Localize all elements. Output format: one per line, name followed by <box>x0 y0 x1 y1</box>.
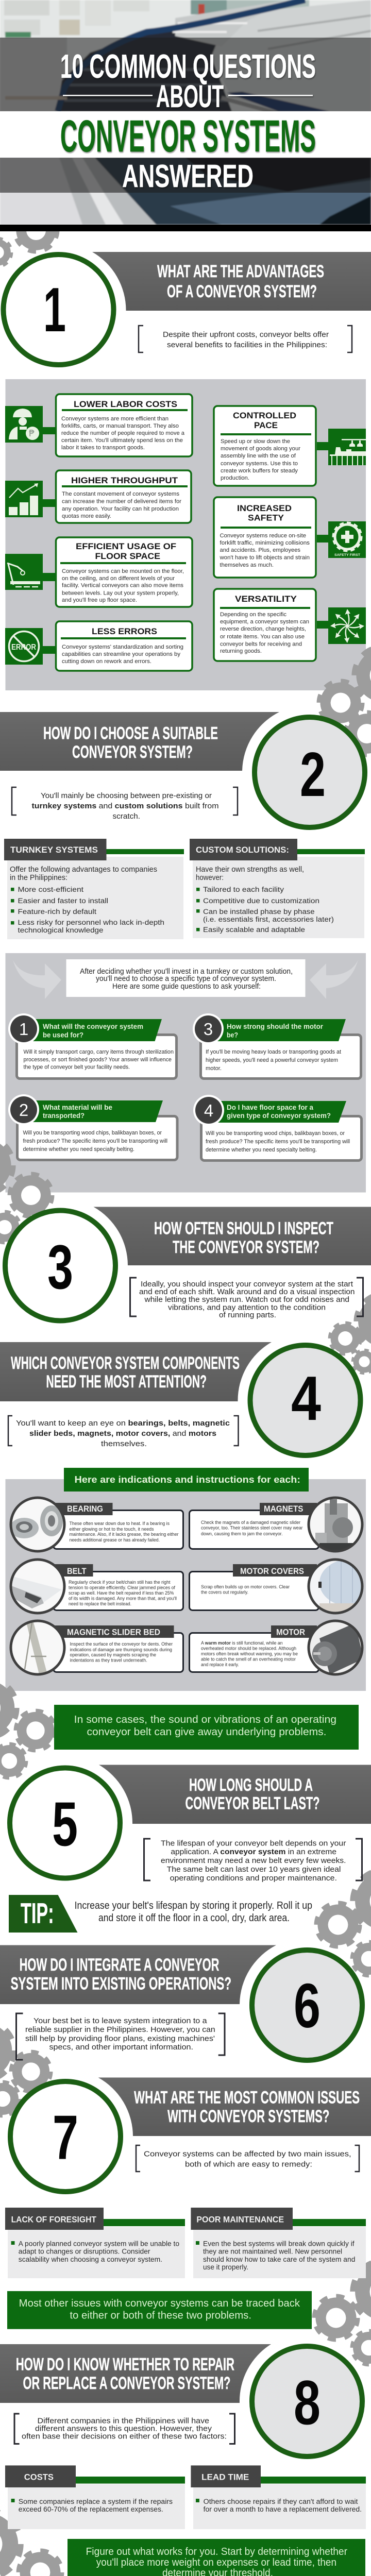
panel: turnkey systems: More cost-efficient <box>18 886 83 893</box>
banner: indications and instructions: Here are indications and instructions for each: <box>74 1475 300 1485</box>
panel: custom solutions <box>190 839 365 938</box>
card: controlled pace: conveyor systems. Use this to <box>221 461 298 467</box>
callout: sounds and vibrations: In some cases, the sound or vibrations of an operating <box>74 1714 336 1725</box>
heading <box>154 1219 333 1257</box>
panel: lack of foresight: A poorly planned conveyor system will be unable to <box>19 2240 179 2248</box>
card: question 1: be used for? <box>43 1030 83 1039</box>
card: motor: A warm motor is still functional, while an <box>201 1640 282 1646</box>
card: magnetic slider bed: indications of damage are thumping sounds during <box>70 1647 172 1653</box>
section 1: advantages <box>3 252 371 365</box>
card: increased safety: and accidents. Plus, employees <box>220 547 301 553</box>
intro text in brackets: turnkey systems and custom solutions built from <box>32 802 218 810</box>
card: efficient usage of floor space <box>43 537 192 607</box>
card: motor: overheated motor should be replaced. Although <box>201 1646 296 1652</box>
intro text in brackets <box>136 2145 359 2172</box>
callout: figure out what works <box>68 2539 365 2576</box>
panel: turnkey systems: Easier and faster to install <box>18 897 108 905</box>
panel: lead time: LEAD TIME <box>201 2473 249 2482</box>
heading band <box>0 1342 272 1401</box>
card: question 3: higher speeds, you'll need a powerful conveyor system <box>206 1057 338 1063</box>
card: less errors: cutting down on rework and errors. <box>62 658 151 665</box>
callout: guide question intro: After deciding whether you'll invest in a turnkey or custom solution, <box>80 968 293 976</box>
intro text in brackets: Despite their upfront costs, conveyor belts offer <box>163 331 329 339</box>
number circle 6: 6 <box>294 1971 321 2041</box>
panel: lead time: for over a month to have a replacement delivered. <box>204 2505 362 2513</box>
panel: lack of foresight: adapt to changes or disruptions. Consider <box>19 2248 150 2256</box>
number circle 2 <box>255 717 365 827</box>
icon: worker with peso coin <box>5 406 43 443</box>
card: question 2 <box>8 1094 177 1160</box>
card: question 1: What will the conveyor system <box>43 1022 143 1030</box>
panel: lead time: Others choose repairs if they can't afford to wait <box>204 2498 358 2505</box>
card: lower labor costs <box>43 394 192 456</box>
arrow: left decorative pointer <box>13 960 61 999</box>
number circle 1 <box>3 255 113 365</box>
panel: turnkey systems: Offer the following advantages to companies <box>10 866 157 874</box>
intro text in brackets: both of which are easy to remedy: <box>185 2161 312 2169</box>
card: question 4: determine whether you need specialty belting. <box>206 1147 317 1153</box>
panel: custom solutions: Can be installed phase by phase <box>203 908 314 916</box>
card: versatility <box>214 589 328 661</box>
intro text in brackets: slider beds, magnets, motor covers, and motors <box>29 1430 216 1438</box>
card: lower labor costs: reduce the number of people required to move a <box>61 430 185 436</box>
panel: turnkey systems: in the Philippines: <box>10 874 68 882</box>
heading: HOW DO I INTEGRATE A CONVEYOR <box>20 1955 219 1975</box>
card: bearing: maintenance. Also, if it lacks grease, the bearing either <box>69 1532 178 1537</box>
number circle 3: 3 <box>47 1232 73 1302</box>
card: question 1: processes, or sort finished goods? Your answer will influence <box>24 1057 172 1063</box>
heading: HOW DO I CHOOSE A SUITABLE <box>43 723 218 743</box>
intro text in brackets: Conveyor systems can be affected by two main issues, <box>144 2150 351 2159</box>
section 5: belt lifespan <box>9 1765 371 1933</box>
card: motor covers: the covers out regularly. <box>201 1590 248 1595</box>
panel: poor maintenance: use it properly. <box>203 2263 248 2271</box>
card: question 3: If you'll be moving heavy loads or transporting goods at <box>206 1049 341 1055</box>
heading <box>185 1775 319 1814</box>
panel: turnkey systems: Less risky for personnel who lack in-depth <box>18 919 164 926</box>
heading band <box>99 1765 371 1824</box>
callout: figure out what works: Figure out what works for you. Start by determining whether <box>86 2546 347 2557</box>
card: question 4: 4 <box>204 1101 213 1120</box>
heading <box>43 723 218 762</box>
heading: NEED THE MOST ATTENTION? <box>46 1372 207 1392</box>
intro text in brackets: Ideally, you should inspect your conveyor system at the start <box>141 1280 353 1289</box>
card: question 2: determine whether you need specialty belting. <box>23 1146 134 1153</box>
panel: turnkey systems: Feature-rich by default <box>18 908 96 916</box>
card: efficient usage of floor space: Conveyor systems can be mounted on the floor, <box>62 568 184 574</box>
number circle 7 <box>10 2081 121 2192</box>
panel: poor maintenance: POOR MAINTENANCE <box>196 2215 284 2225</box>
card: increased safety: Conveyor systems reduce on-site <box>220 533 306 539</box>
title: ANSWERED <box>122 159 254 194</box>
white title band <box>0 111 371 158</box>
title <box>60 47 316 194</box>
number circle 4: 4 <box>291 1363 321 1433</box>
card: efficient usage of floor space: between levels. Lay out your system properly, <box>62 590 179 597</box>
card: versatility: VERSATILITY <box>235 595 297 604</box>
card: controlled pace: PACE <box>254 421 278 430</box>
intro text in brackets <box>16 2013 225 2060</box>
card: motor covers <box>190 1558 371 1614</box>
card: motor <box>190 1620 363 1675</box>
card: magnetic slider bed: Inspect the surface of the conveyor for dents. Other <box>70 1641 173 1647</box>
panel: custom solutions: however: <box>196 874 224 882</box>
card: efficient usage of floor space: facility. Vertical conveyors can also move items <box>62 582 184 588</box>
card: controlled pace: create work buffers for steady <box>221 468 298 474</box>
heading <box>134 2088 360 2126</box>
card: efficient usage of floor space: EFFICIENT USAGE OF <box>76 542 176 551</box>
heading <box>157 262 324 301</box>
card: motor: able to catch the smell of an overheating motor <box>201 1657 296 1663</box>
icon: no errors sign: ERROR <box>11 643 36 652</box>
number circle 1: 1 <box>43 275 66 345</box>
card: question 1: 1 <box>19 1020 28 1039</box>
intro text in brackets: reliable supplier in the Philippines. However, you can <box>25 2026 215 2034</box>
intro text in brackets: Your best bet is to leave system integration to a <box>33 2017 208 2025</box>
card: versatility: reverse direction, change heights, <box>220 626 306 632</box>
heading: HOW DO I KNOW WHETHER TO REPAIR <box>16 2355 234 2375</box>
number circle 5: 5 <box>52 1789 78 1859</box>
section 6: integration <box>0 1945 362 2060</box>
card: question 2: transported? <box>43 1111 85 1120</box>
icon: no errors sign <box>5 628 43 665</box>
intro text in brackets: application. A conveyor system in an extreme <box>171 1848 336 1856</box>
card: lower labor costs: LOWER LABOR COSTS <box>74 400 177 409</box>
intro text in brackets: The lifespan of your conveyor belt depends on your <box>161 1839 346 1848</box>
intro text in brackets: specs, and other important information. <box>49 2043 193 2052</box>
heading: SYSTEM INTO EXISTING OPERATIONS? <box>11 1974 231 1994</box>
title: ABOUT <box>156 79 224 114</box>
card: efficient usage of floor space: on the ceiling, and on different levels of your <box>62 575 175 582</box>
card: bearing: either glowing or hot to the touch, it needs <box>69 1527 154 1532</box>
intro text in brackets: and end of each shift. Walk around and do a visual inspection <box>139 1288 355 1296</box>
card: magnets: MAGNETS <box>264 1504 303 1514</box>
intro text in brackets <box>139 326 352 352</box>
card: magnets: conveyor, too. Their stainless steel cover may wear <box>201 1525 303 1531</box>
card: less errors: Conveyor systems' standardization and sorting <box>62 644 183 650</box>
callout: guide question intro <box>66 959 305 997</box>
card: versatility: Depending on the specific <box>220 612 287 618</box>
card: increased safety: forklift traffic, minimizing collisions <box>220 540 310 546</box>
hero photo: conveyor line <box>0 0 371 225</box>
intro text in brackets <box>8 1416 238 1448</box>
card: magnets: Check the magnets of a damaged magnetic slider <box>201 1520 300 1526</box>
callout: sounds and vibrations: conveyor belt can give away underlying problems. <box>87 1726 327 1738</box>
panel: lack of foresight <box>5 2208 185 2278</box>
card: belt: need to replace the belt instead. <box>69 1601 131 1607</box>
panel: poor maintenance: should know how to take care of the system and <box>203 2256 355 2263</box>
tip text <box>75 1900 312 1924</box>
arrow: right decorative pointer <box>310 960 358 999</box>
card: magnetic slider bed: indentations as they travel underneath. <box>70 1658 147 1663</box>
heading band <box>0 1945 276 2004</box>
card: efficient usage of floor space: FLOOR SPACE <box>95 552 160 561</box>
card: question 4: Will you be transporting wood chips, balikbayan boxes, or <box>206 1130 345 1137</box>
card: versatility: returning goods. <box>220 648 262 654</box>
panel: costs: Some companies replace a system if the repairs <box>19 2498 173 2505</box>
number circle 8 <box>252 2346 362 2456</box>
intro text in brackets: Different companies in the Philippines will have <box>37 2417 209 2426</box>
callout: two problems <box>7 2291 312 2329</box>
card: increased safety <box>214 497 328 578</box>
icon: robot arm <box>5 554 43 590</box>
card: motor covers: MOTOR COVERS <box>240 1567 304 1576</box>
card: higher throughput: can increase the number of delivered items for <box>62 499 181 505</box>
card: question 3: 3 <box>204 1020 213 1039</box>
heading <box>11 1955 231 1994</box>
card: belt: BELT <box>67 1567 87 1576</box>
card: question 3 <box>193 1013 361 1079</box>
card: question 2: 2 <box>19 1100 28 1120</box>
panel: costs: exceed 60-70% of the replacement expenses. <box>19 2505 163 2513</box>
card: increased safety: INCREASED <box>237 504 292 513</box>
tip text: and store it off the floor in a cool, dry, dark area. <box>98 1912 290 1924</box>
card: belt <box>9 1558 183 1614</box>
heading band <box>94 1207 371 1265</box>
intro text in brackets <box>144 1839 362 1883</box>
panel: custom solutions: (i.e. essentials first, accessories later) <box>203 916 334 923</box>
panel: lead time <box>191 2465 366 2529</box>
card: belt: scrap as well. Have the belt repaired if less than 25% <box>69 1590 174 1596</box>
panel: lack of foresight: scalability when choosing a conveyor system. <box>19 2256 162 2263</box>
panel: custom solutions: Competitive due to customization <box>203 897 319 905</box>
card: belt: Regularly check if your belt/chain still has the right <box>69 1580 171 1585</box>
card: versatility: or rotate items. You can also use <box>220 634 305 640</box>
card: less errors: LESS ERRORS <box>92 627 157 636</box>
card: higher throughput: any operation. Your facility can hit production <box>62 506 179 512</box>
heading: OR REPLACE A CONVEYOR SYSTEM? <box>23 2374 231 2393</box>
card: bearing: These often wear down due to heat. If a bearing is <box>69 1521 170 1527</box>
card: magnetic slider bed <box>9 1620 183 1675</box>
panel: benefits of conveyor systems <box>5 379 366 690</box>
intro text in brackets: operating conditions and proper maintenance. <box>170 1874 337 1883</box>
card: lower labor costs: certain item. You'll ultimately spend less on the <box>61 437 183 444</box>
icon: multi-directional arrows <box>328 607 366 644</box>
number circle 7: 7 <box>53 2103 78 2173</box>
card: question 4 <box>193 1095 362 1160</box>
section 4: components <box>0 1342 361 1750</box>
heading <box>16 2355 234 2393</box>
intro text in brackets: environment may need a new belt every few weeks. <box>161 1857 346 1865</box>
panel: poor maintenance: they are not maintained well. New personnel <box>203 2248 342 2256</box>
card: controlled pace: CONTROLLED <box>233 411 296 420</box>
black bar under hero <box>0 225 371 231</box>
card: lower labor costs: forklifts, carts, or manual transport. They also <box>61 423 179 429</box>
callout: figure out what works: you'll place more weight on expenses or lead time, then <box>96 2557 336 2568</box>
intro text in brackets: You'll mainly be choosing between pre-existing or <box>41 792 212 800</box>
card: belt: of its width is damaged. Any more than that, and you'll <box>69 1596 177 1601</box>
section 3: inspection <box>5 1207 371 1321</box>
heading band <box>0 2344 271 2403</box>
card: belt: tension to operate efficiently. Clear jammed pieces of <box>69 1585 175 1591</box>
card: motor covers: Scrap often builds up on motor covers. Clear <box>201 1584 290 1590</box>
icon: growth chart <box>5 481 43 517</box>
card: motor: MOTOR <box>276 1628 305 1637</box>
card: question 1: Will it simply transport cargo, carry items through sterilization <box>24 1049 174 1055</box>
card: higher throughput: quotas more easily. <box>62 513 111 519</box>
banner: indications and instructions <box>64 1468 309 1492</box>
panel: costs <box>5 2465 185 2529</box>
heading: CONVEYOR SYSTEM? <box>72 742 193 762</box>
panel: poor maintenance <box>191 2208 366 2278</box>
intro text in brackets: of running parts. <box>219 1311 276 1319</box>
heading <box>11 1353 240 1392</box>
section 2: choosing a system <box>0 712 365 939</box>
card: controlled pace: assembly line with the use of <box>221 453 296 459</box>
panel: turnkey systems: TURNKEY SYSTEMS <box>10 845 98 855</box>
callout: two problems: Most other issues with conveyor systems can be traced back <box>19 2298 300 2309</box>
card: motor: motors often break without warning, you may be <box>201 1651 298 1657</box>
intro text in brackets: vibrations, and pay attention to the condition <box>168 1303 326 1312</box>
number circle 8: 8 <box>294 2367 321 2437</box>
number circle 5 <box>10 1768 120 1878</box>
callout: guide question intro: Here are some guide questions to ask yourself: <box>112 982 261 991</box>
card: question 3: be? <box>227 1030 238 1039</box>
tip text: Increase your belt's lifespan by storing it properly. Roll it up <box>75 1900 312 1911</box>
card: higher throughput <box>43 470 191 523</box>
card: question 2: What material will be <box>43 1103 112 1111</box>
callout: guide question intro: you'll need to choose a specific type of conveyor system. <box>96 975 276 983</box>
card: question 4: Do I have floor space for a <box>227 1103 313 1111</box>
intro text in brackets: often base their decisions on either of these two factors: <box>22 2432 227 2441</box>
card: magnets: down, causing them to jam the conveyor. <box>201 1531 282 1537</box>
panel: costs: COSTS <box>24 2473 54 2482</box>
card: higher throughput: HIGHER THROUGHPUT <box>71 476 178 485</box>
intro text in brackets: still help by providing floor plans, existing machines' <box>25 2035 215 2043</box>
card: question 3: How strong should the motor <box>227 1022 324 1030</box>
tip badge: TIP: <box>21 1897 54 1929</box>
panel: custom solutions: Tailored to each facility <box>203 886 284 893</box>
card: controlled pace <box>214 406 328 486</box>
panel: custom solutions: CUSTOM SOLUTIONS: <box>196 845 289 855</box>
number circle 3 <box>5 1211 115 1321</box>
section 7: common issues <box>5 2077 371 2329</box>
card: higher throughput: The constant movement of conveyor systems <box>62 491 180 497</box>
card: versatility: equipment, a conveyor system can <box>220 619 309 625</box>
card: magnets <box>190 1497 363 1553</box>
card: magnetic slider bed: MAGNETIC SLIDER BED <box>67 1628 160 1637</box>
intro text in brackets: different answers to this question. However, they <box>35 2425 212 2433</box>
card: versatility: conveyor belts for receiving and <box>220 641 302 647</box>
card: controlled pace: movement of goods along your <box>221 446 300 452</box>
card: question 3: motor. <box>206 1065 222 1072</box>
card: magnetic slider bed: operation, caused by magnets scraping the <box>70 1652 156 1658</box>
intro text in brackets <box>130 1278 363 1319</box>
panel: poor maintenance: Even the best systems will break down quickly if <box>203 2240 355 2248</box>
section 8: repair or replace <box>0 2344 366 2576</box>
card: bearing: BEARING <box>67 1504 103 1514</box>
card: controlled pace: production. <box>221 475 249 481</box>
panel: component indications <box>5 1479 371 1691</box>
panel: guide questions <box>5 953 366 1192</box>
intro text in brackets <box>12 787 238 821</box>
card: efficient usage of floor space: and you'll free up floor space. <box>62 597 137 603</box>
card: lower labor costs: labor it takes to transport goods. <box>61 445 145 451</box>
panel: lack of foresight: LACK OF FORESIGHT <box>11 2215 96 2225</box>
card: question 4: given type of conveyor system? <box>227 1111 331 1120</box>
panel: custom solutions: Have their own strengths as well, <box>196 866 304 874</box>
card: question 4: fresh produce? The specific items you'll be transporting will <box>206 1139 350 1145</box>
intro text in brackets: several benefits to facilities in the Philippines: <box>167 341 327 349</box>
card: less errors: capabilities can streamline your operations by <box>62 651 181 657</box>
card: less errors <box>43 621 192 671</box>
panel: turnkey systems <box>4 839 184 939</box>
card: lower labor costs: Conveyor systems are more efficient than <box>61 416 168 422</box>
card: increased safety: SAFETY <box>248 513 284 522</box>
card: question 1 <box>8 1013 176 1079</box>
icon: safety first gear: SAFETY FIRST <box>334 553 360 557</box>
card: controlled pace: Speed up or slow down the <box>221 438 290 445</box>
card: bearing <box>9 1497 183 1552</box>
panel: turnkey systems: technological knowledge <box>18 926 103 934</box>
panel: custom solutions: Easily scalable and adaptable <box>203 926 305 934</box>
intro text in brackets: while letting the system run. Watch out for odd noises and <box>144 1296 349 1304</box>
intro text in brackets <box>14 2414 235 2444</box>
hero: conveyor photo with title <box>0 0 371 231</box>
number circle 4 <box>250 1345 361 1455</box>
callout: two problems: to either or both of these two problems. <box>70 2310 251 2321</box>
heading band <box>98 2077 371 2136</box>
intro text in brackets: scratch. <box>112 812 140 821</box>
card: question 1: the type of conveyor belt your facility needs. <box>24 1064 130 1071</box>
card: question 2: Will you be transporting wood chips, balikbayan boxes, or <box>23 1130 162 1136</box>
card: increased safety: won't have to lift objects and strain <box>219 554 310 561</box>
heading band <box>92 252 371 311</box>
card: bearing: needs additional grease or has already failed. <box>69 1537 160 1543</box>
icon: safety first gear <box>328 521 366 558</box>
heading band <box>0 712 279 771</box>
number circle 2: 2 <box>300 739 326 809</box>
card: increased safety: themselves as much. <box>220 562 274 568</box>
intro text in brackets: The same belt can last over 10 years given ideal <box>167 1866 341 1874</box>
tip badge <box>9 1895 77 1933</box>
intro text in brackets: You'll want to keep an eye on bearings, belts, magnetic <box>16 1419 230 1428</box>
callout: sounds and vibrations <box>54 1705 359 1750</box>
card: motor: and replace it early. <box>201 1662 239 1668</box>
number circle 6 <box>252 1950 362 2060</box>
card: question 2: fresh produce? The specific items you'll be transporting will <box>23 1138 167 1144</box>
icon: assembly line <box>328 429 366 465</box>
intro text in brackets: themselves. <box>101 1440 147 1448</box>
icon: worker with peso coin: ₱ <box>29 428 35 439</box>
